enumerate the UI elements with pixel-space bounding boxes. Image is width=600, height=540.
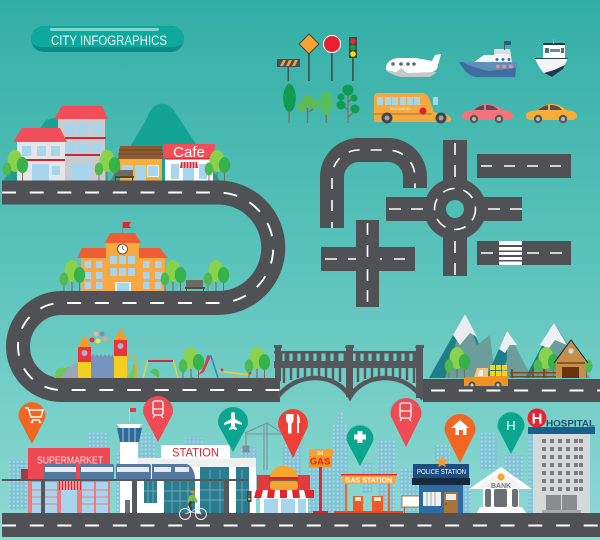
scene: bank: [469, 467, 532, 513]
scene: mountains behind houses: [3, 104, 220, 181]
icon: construction crane: [243, 423, 283, 470]
scene: orange pickup truck: [464, 365, 508, 388]
scene: police station: [412, 456, 470, 514]
scene: bench on top road: [115, 170, 134, 181]
scene: school: [77, 222, 168, 291]
scene: police station: POLICE STATION: [417, 467, 466, 476]
scene: gas price sign: 24: [317, 451, 324, 457]
scene: notice board: [402, 496, 422, 513]
pin: H teal: H: [506, 418, 516, 433]
scene: station building: STATION: [172, 446, 219, 460]
main winding road: [2, 192, 280, 390]
scene: burger restaurant: [254, 466, 314, 513]
scene: train on rail: [2, 464, 249, 513]
icon: school bus: [374, 93, 451, 124]
title badge: CITY INFOGRAPHICS: [51, 33, 167, 48]
road piece: straight: [477, 154, 571, 178]
road piece: crosswalk: [477, 241, 571, 265]
pin: fork and knife: [278, 409, 308, 458]
scene: slide, swing and seesaw: [179, 347, 270, 378]
scene: playground: [54, 328, 178, 378]
icon: school bus: BUS SCHOOL: [390, 107, 411, 111]
scene: gas station: [334, 474, 403, 514]
pin: airplane: [218, 407, 248, 452]
scene: trees along top road: [3, 150, 230, 181]
pin: medical cross: [347, 425, 374, 466]
road piece: roundabout: [386, 140, 522, 276]
icon: hospital H badge: [528, 408, 546, 428]
scene: bank: BANK: [491, 483, 511, 490]
scene: school trees and bench: [60, 260, 229, 291]
icon: airplane: [386, 54, 441, 77]
icon: cyclist: [180, 489, 206, 520]
title badge: [31, 26, 184, 52]
icon set: trees: [283, 84, 360, 123]
scene: supermarket: SUPERMARKET: [37, 454, 103, 466]
scene: mountain trees: [445, 347, 592, 378]
scene: gas price sign: GAS: [310, 456, 330, 468]
scene: hospital: HOSPITAL: [546, 418, 595, 430]
scene: front red-roof house: [13, 128, 67, 181]
scene: wooden cabin: [554, 340, 588, 378]
icon: street traffic light: [247, 491, 252, 514]
scene: hospital: [528, 418, 595, 513]
icon: cruise ship: [459, 41, 517, 77]
icon set: road signs: [277, 34, 357, 81]
scene: control tower: [117, 408, 142, 513]
pin: H teal: [498, 412, 524, 454]
right road segment: [423, 379, 600, 402]
scene: supermarket: [21, 448, 110, 513]
scene: gas station: GAS STATION: [345, 478, 392, 484]
scene: gas price sign: [309, 448, 333, 514]
bottom road: [2, 513, 600, 537]
bridge: [270, 345, 424, 402]
icon: yellow car: [526, 104, 577, 123]
icon: hospital H badge: H: [532, 410, 542, 428]
city skyline background: [9, 411, 533, 513]
scene: tall red-roof house: [54, 106, 108, 181]
pin: shopping cart: [19, 402, 46, 444]
scene: cafe: Cafe: [173, 144, 205, 161]
road piece: U-curve: [332, 150, 415, 228]
scene: brown roof shop: [118, 146, 163, 181]
scene: station building: [138, 445, 256, 513]
pin: train red: [143, 396, 173, 442]
scene: wooden fence: [510, 369, 558, 378]
icon: boat: [535, 39, 568, 77]
scene: cafe: [163, 144, 215, 181]
scene: snowy mountains: [429, 314, 590, 378]
pin: home: [444, 414, 476, 463]
icon: pink car: [462, 104, 513, 123]
road piece: crossroad: [321, 220, 415, 307]
pin: train: [390, 398, 422, 447]
